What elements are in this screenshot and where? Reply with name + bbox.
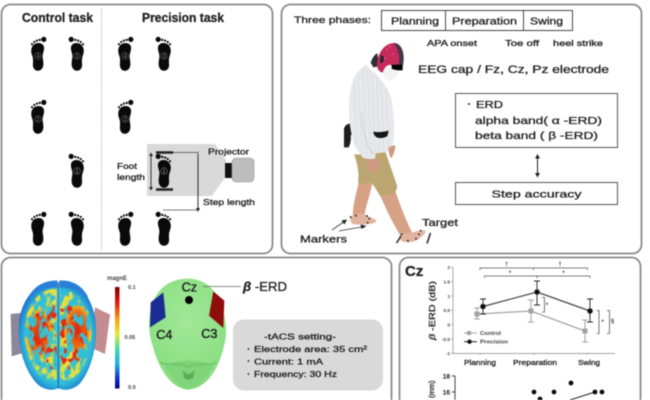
panel: Cz results (400, 258, 640, 400)
phase event labels: heel strike (553, 39, 604, 48)
line chart: beta ERD: Planning (464, 358, 496, 367)
head model with electrodes: Cz (182, 281, 197, 295)
text: EEG cap: EEG cap / Fz, Cz, Pz electrode (418, 64, 609, 76)
precision footprints: 4 (123, 54, 127, 60)
line chart: beta ERD: 2 (447, 265, 450, 271)
ERD box: alpha band( α -ERD) (475, 115, 602, 127)
phase event labels: Toe off (505, 39, 540, 48)
control footprints: 3 (75, 54, 79, 60)
tACS setting box: Frequency: 30 Hz (254, 369, 337, 379)
colour bar: magnE (107, 276, 127, 282)
scatter chart: step accuracy (427, 374, 604, 400)
tACS setting box: Electrode area: 35 cm² (254, 344, 367, 354)
colour bar (107, 276, 136, 391)
ERD box: ERD (476, 99, 504, 111)
head model with electrodes (149, 279, 226, 390)
scatter chart: step accuracy: (mm) (427, 380, 436, 398)
significance brackets (480, 268, 610, 334)
line chart: beta ERD: 1 (447, 294, 450, 300)
line chart: beta ERD: β -ERD (dB) (427, 281, 437, 341)
label: target: Target (422, 217, 458, 229)
head model with electrodes: C3 (201, 327, 217, 341)
control series (474, 300, 588, 342)
legend: Precision (480, 340, 509, 346)
control footprints (31, 37, 84, 246)
panel: tACS simulation (2, 258, 392, 400)
phase boxes: Preparation (452, 16, 517, 28)
line chart: beta ERD: * (509, 271, 512, 277)
precision footprints (118, 37, 171, 246)
line chart: beta ERD: † (558, 262, 562, 268)
label: foot length: length (117, 172, 145, 182)
heading: precision task: Precision task (142, 11, 224, 25)
illustration: walking person (344, 43, 426, 242)
legend: Control (480, 331, 501, 337)
phase event labels: APA onset (427, 39, 478, 48)
line chart: beta ERD: -0.5 (442, 337, 450, 343)
head model with electrodes: C4 (156, 328, 172, 342)
heading: control task: Control task (22, 11, 93, 25)
control footprints: 4 (36, 54, 40, 60)
target marks (396, 233, 430, 244)
line chart: beta ERD: § (611, 319, 615, 325)
legend (464, 331, 509, 346)
colour bar: 0.05 (124, 335, 135, 341)
axes (451, 267, 615, 355)
label: projector: Projector (208, 146, 249, 156)
colour bar: 0.0 (128, 385, 136, 391)
line chart: beta ERD: 1.5 (443, 280, 450, 286)
line chart: beta ERD: 0 (447, 322, 450, 328)
precision footprints: 3 (162, 54, 166, 60)
label: foot length: Foot (117, 161, 138, 171)
line chart: beta ERD: Swing (578, 358, 600, 367)
panel: experiment setup (282, 4, 642, 254)
ERD box (456, 94, 618, 148)
line chart: beta ERD: * (546, 303, 549, 309)
phase event labels (427, 39, 604, 48)
control footprints: 1 (75, 169, 79, 175)
precision footprints: 1 (162, 169, 166, 175)
target bars and dimension arrows (149, 152, 200, 212)
line chart: beta ERD (427, 262, 615, 367)
step accuracy box: Step accuracy (492, 188, 582, 200)
scatter chart: step accuracy: 18 (443, 374, 450, 380)
line chart: beta ERD: 0.5 (443, 308, 450, 314)
line chart: beta ERD: -1 (446, 351, 450, 357)
line chart: beta ERD: * (601, 320, 604, 326)
double arrow (535, 154, 540, 178)
phase boxes: Planning (391, 16, 439, 28)
label: markers: Markers (300, 234, 347, 246)
tACS setting box: -tACS setting- (264, 332, 336, 342)
icon: projector (225, 158, 254, 182)
panel: task conditions (2, 4, 272, 254)
label: beta ERD: β -ERD (242, 280, 287, 294)
ERD box: beta band ( β -ERD) (475, 130, 598, 142)
brain model (11, 281, 110, 390)
label: step length: Step length (203, 197, 255, 207)
line chart: beta ERD: Preparation (513, 358, 557, 367)
label: foot length (117, 161, 145, 182)
marker arrows (332, 220, 366, 231)
tACS setting box: Current: 1 mA (254, 356, 323, 366)
callout line (203, 286, 241, 288)
line chart: beta ERD: † (505, 262, 508, 268)
heading: Cz: Cz (405, 263, 423, 280)
projection area (147, 144, 226, 196)
colour bar: 0.1 (128, 285, 136, 291)
line chart: beta ERD: * (562, 271, 565, 277)
precision series (480, 281, 593, 322)
step accuracy box (456, 182, 618, 204)
phase boxes (382, 10, 572, 30)
phase boxes: Swing (530, 16, 563, 28)
control footprints: 2 (36, 117, 40, 123)
tACS setting box (233, 320, 383, 390)
precision footprints: 2 (123, 117, 127, 123)
label: three phases: Three phases: (294, 15, 371, 26)
scatter chart: step accuracy: 16 (443, 390, 450, 396)
